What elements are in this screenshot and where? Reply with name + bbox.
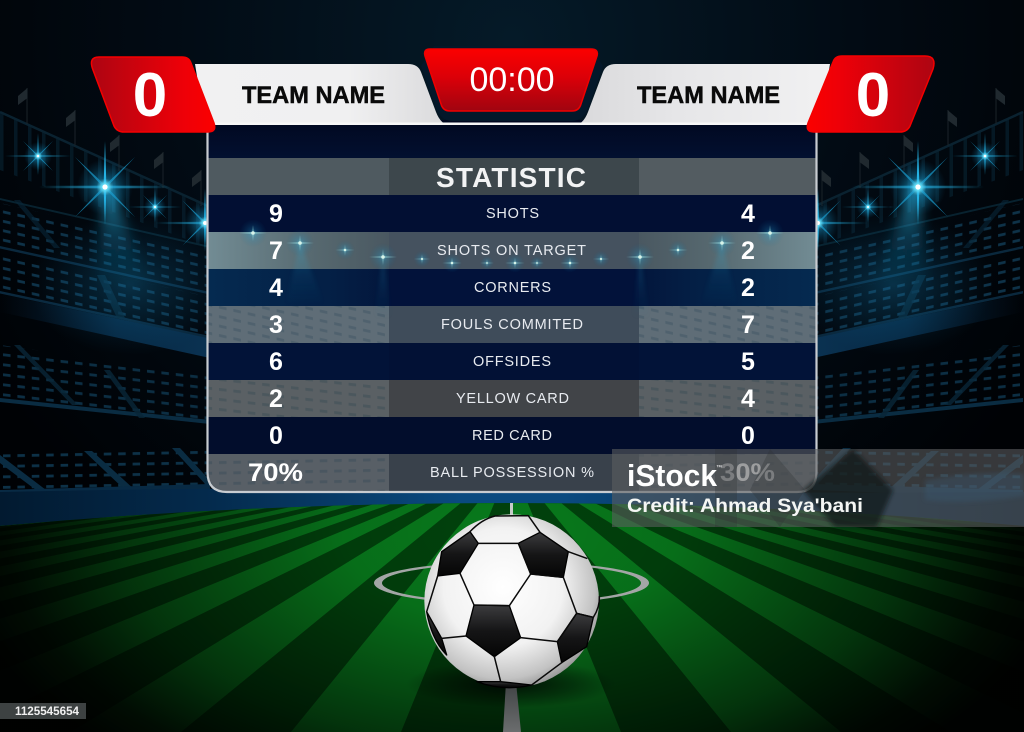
row: shots: SHOTS — [486, 206, 539, 222]
row: corners: CORNERS — [474, 280, 551, 296]
row: fouls commited: FOULS COMMITED — [441, 317, 583, 333]
row: red card — [269, 422, 755, 450]
row: shots: 9 — [269, 200, 283, 228]
row: red card: 0 — [269, 422, 283, 450]
ball shadow — [406, 660, 616, 708]
iStock logo: ™ — [716, 464, 722, 471]
right stands and floodlights — [768, 88, 1023, 498]
row: fouls commited — [269, 311, 755, 339]
right team bar — [574, 64, 830, 125]
credit: Credit: Ahmad Sya'bani — [627, 496, 863, 517]
heading: statistic: STATISTIC — [436, 162, 586, 193]
image id tag — [0, 703, 86, 719]
row: fouls commited: 7 — [741, 311, 755, 339]
row: yellow card: 4 — [741, 385, 755, 413]
right score — [807, 56, 934, 132]
row: corners: 4 — [269, 274, 283, 302]
watermark band — [612, 449, 1024, 527]
panel border — [208, 125, 816, 492]
row: ball possession — [248, 459, 775, 487]
left team bar — [195, 64, 450, 125]
row: shots on target: SHOTS ON TARGET — [437, 243, 586, 259]
pitch stripes — [0, 503, 1000, 732]
row: ball possession: 70% — [248, 459, 303, 487]
bar base line — [205, 122, 820, 125]
row: offsides: 6 — [269, 348, 283, 376]
row: shots: 4 — [741, 200, 755, 228]
lights seen through panel — [240, 222, 782, 294]
timer notch — [421, 46, 603, 121]
row: offsides — [269, 348, 755, 376]
statistic panel — [208, 120, 817, 492]
right team name: TEAM NAME — [637, 82, 780, 109]
seats seen through panel — [208, 306, 817, 492]
row backgrounds — [208, 195, 817, 492]
row: yellow card: YELLOW CARD — [456, 391, 569, 407]
left score — [91, 57, 215, 132]
watermark ball shapes — [715, 449, 1024, 527]
row: red card: RED CARD — [472, 428, 552, 444]
iStock logo: iStock — [627, 458, 718, 493]
row: ball possession: 30% — [720, 459, 775, 487]
halfway line top — [510, 503, 513, 517]
blue horizon band — [0, 488, 1024, 530]
row: shots on target: 2 — [741, 237, 755, 265]
row: corners: 2 — [741, 274, 755, 302]
row: offsides: 5 — [741, 348, 755, 376]
image id tag: 1125545654 — [15, 704, 79, 718]
timer — [425, 49, 597, 111]
right score: 0 — [856, 61, 890, 130]
row: red card: 0 — [741, 422, 755, 450]
ball black patches — [427, 532, 593, 688]
centre circle — [374, 562, 649, 604]
row: yellow card: 2 — [269, 385, 283, 413]
scoreboard bar — [91, 46, 934, 132]
row: shots on target — [269, 237, 755, 265]
row: ball possession: BALL POSSESSION % — [430, 465, 594, 481]
header row — [208, 158, 817, 195]
halfway line bottom — [503, 682, 521, 732]
left score: 0 — [133, 61, 167, 130]
left stands and floodlights — [0, 88, 254, 498]
row: corners — [269, 274, 755, 302]
timer: 00:00 — [469, 61, 555, 99]
ball seams — [427, 516, 599, 685]
pitch — [0, 503, 1024, 732]
row: offsides: OFFSIDES — [473, 354, 551, 370]
soccer ball — [424, 514, 599, 688]
row: shots on target: 7 — [269, 237, 283, 265]
left team name: TEAM NAME — [242, 82, 385, 109]
row: fouls commited: 3 — [269, 311, 283, 339]
row: yellow card — [269, 385, 755, 413]
row: shots — [269, 200, 755, 228]
